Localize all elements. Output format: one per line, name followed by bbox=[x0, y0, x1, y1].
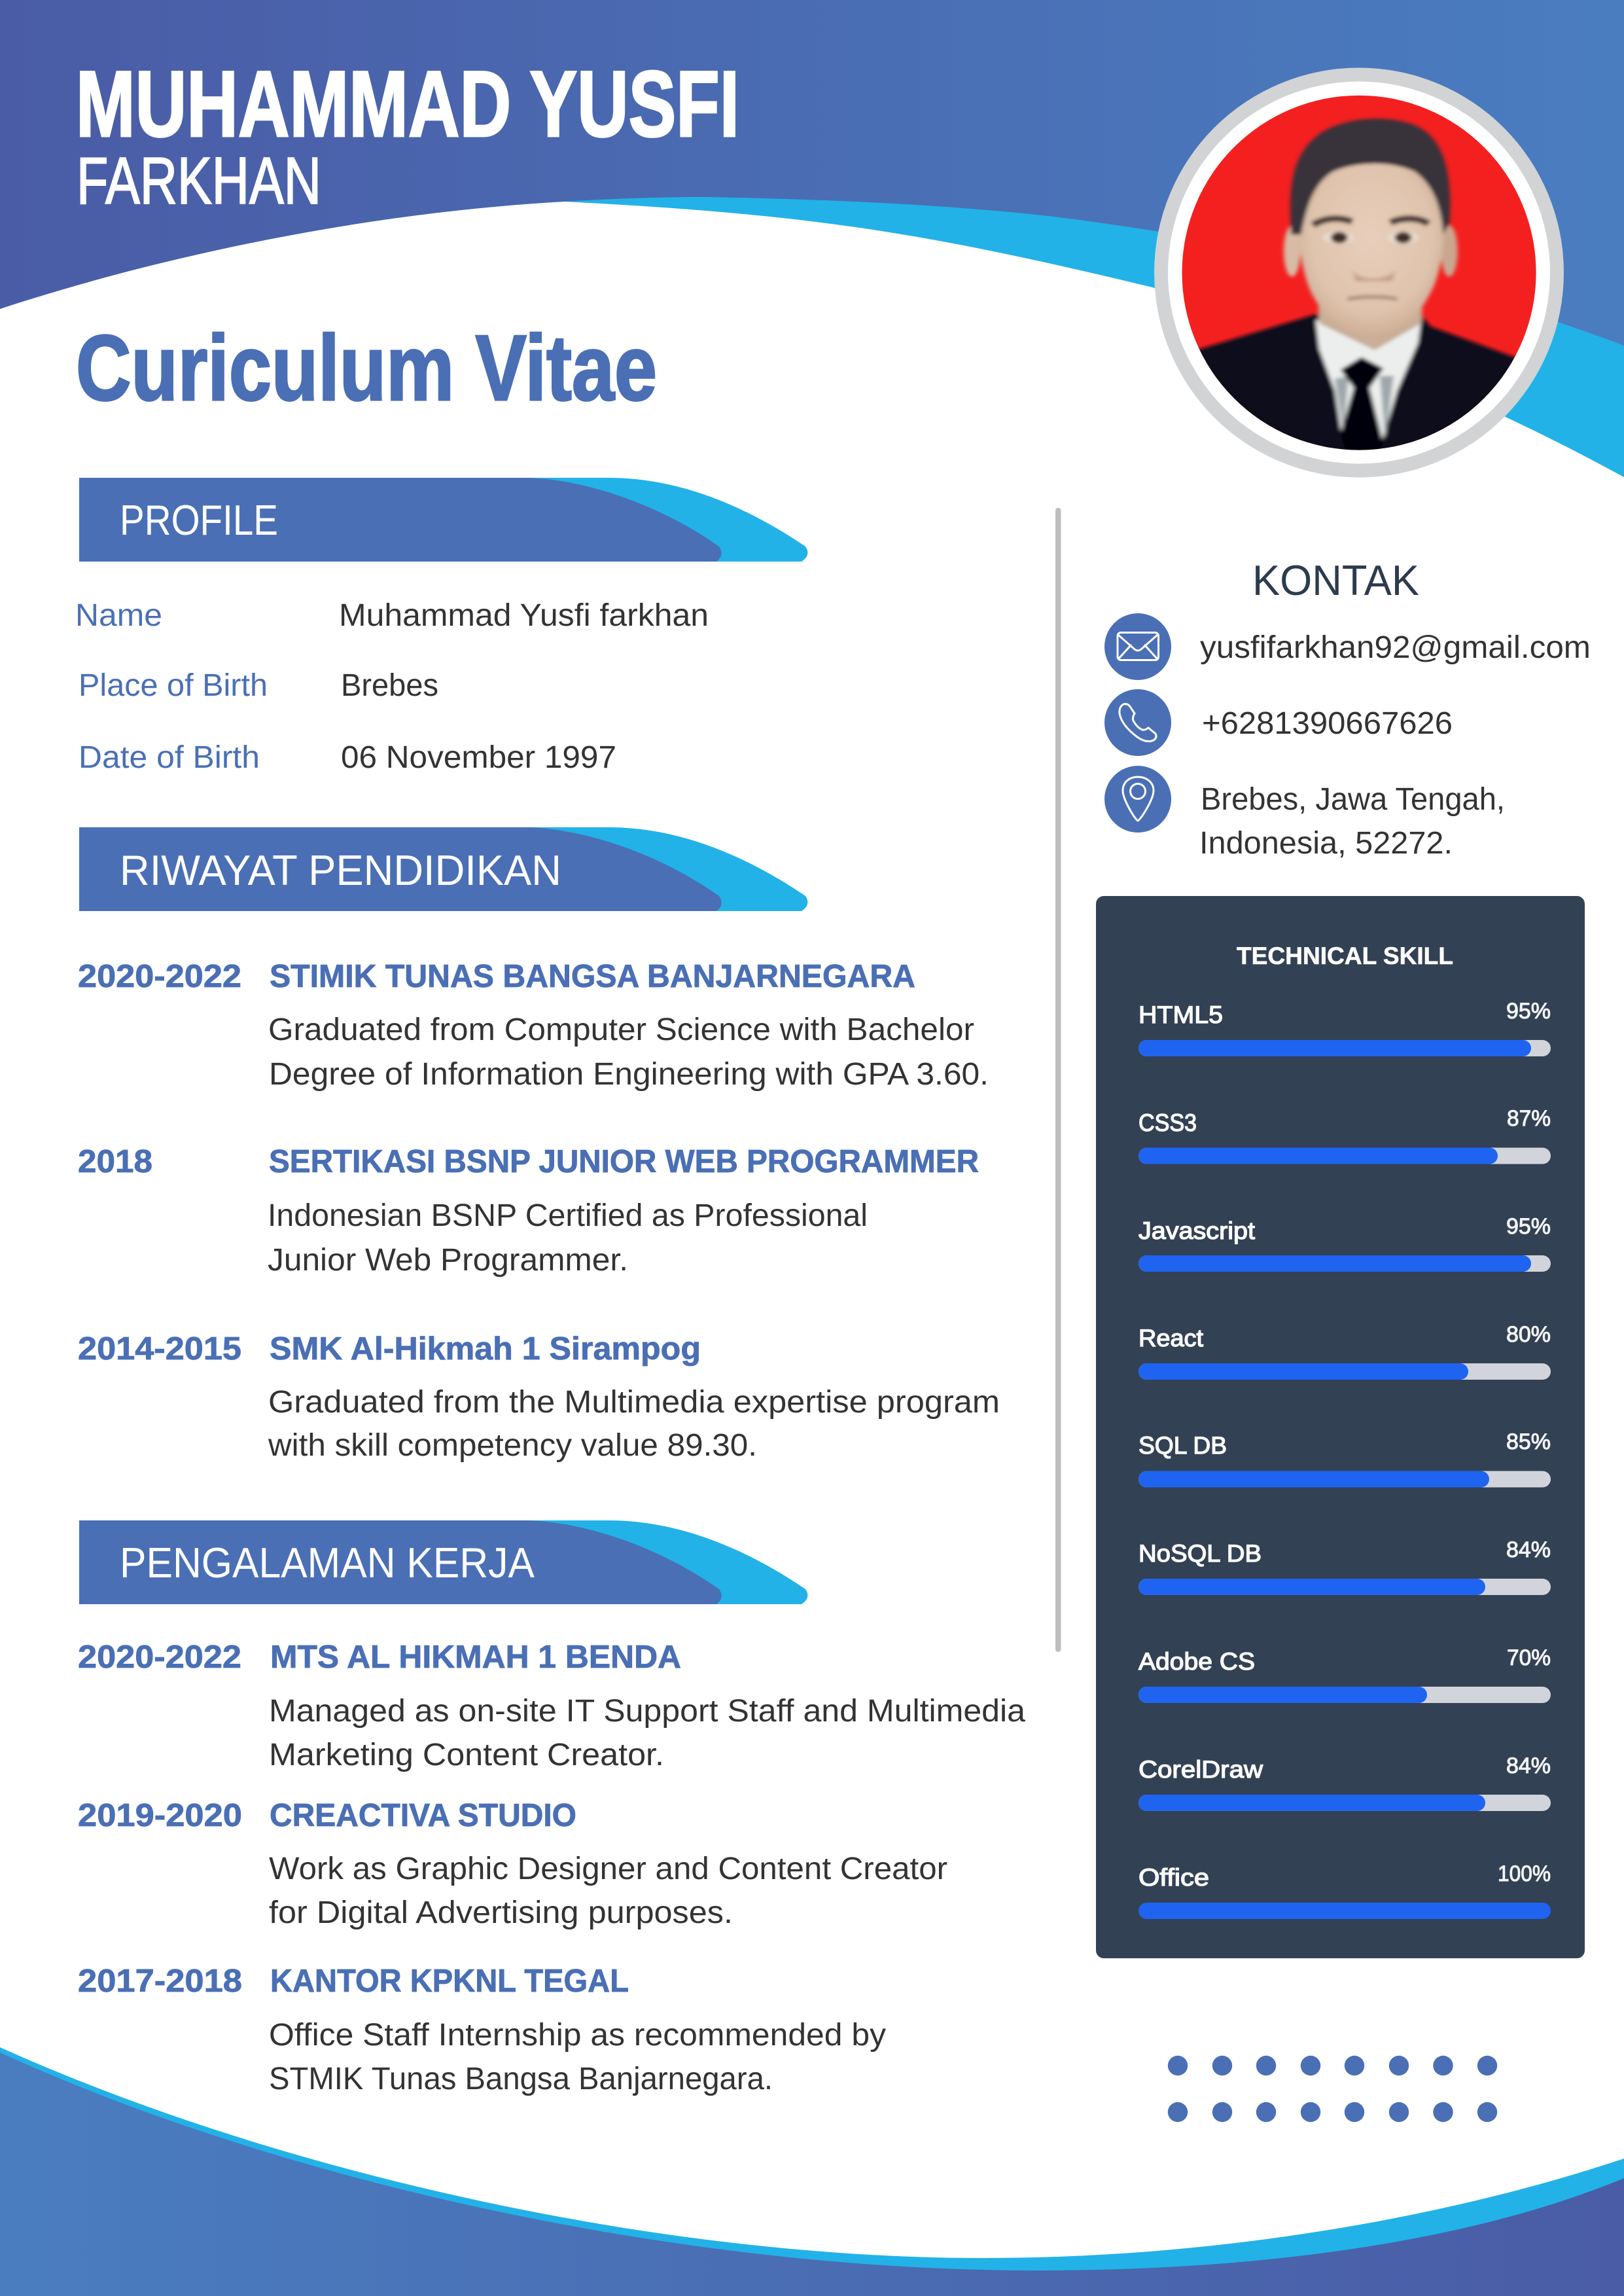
portrait illustration bbox=[1182, 96, 1536, 450]
education entry: SMK: SMK Al-Hikmah 1 Sirampog bbox=[270, 1331, 701, 1367]
name heading: FARKHAN bbox=[77, 145, 321, 218]
footer wave: blue band bbox=[0, 2053, 1624, 2296]
name heading bbox=[76, 52, 739, 218]
profile row: date of birth: 06 November 1997 bbox=[341, 740, 616, 775]
profile row: name: Muhammad Yusfi farkhan bbox=[339, 598, 709, 633]
skill: SQL DB 85%: SQL DB bbox=[1139, 1432, 1227, 1459]
skill: React 80% bbox=[1139, 1322, 1551, 1380]
section header: profile: PROFILE bbox=[120, 496, 278, 544]
profile row: date of birth: Date of Birth bbox=[79, 740, 260, 775]
name heading: MUHAMMAD YUSFI bbox=[76, 52, 739, 156]
footer wave: cyan accent bbox=[0, 2047, 1624, 2296]
skill: SQL DB 85%: 85% bbox=[1506, 1429, 1551, 1454]
icon: email bbox=[1104, 613, 1171, 680]
skill: Office 100%: Office bbox=[1139, 1864, 1209, 1891]
address: Indonesia, 52272. bbox=[1199, 826, 1453, 861]
skill: HTML5 95% bbox=[1139, 999, 1551, 1056]
skill: Adobe CS 70%: 70% bbox=[1507, 1645, 1551, 1670]
skill: CorelDraw 84%: CorelDraw bbox=[1139, 1756, 1263, 1783]
skill: Javascript 95%: 95% bbox=[1506, 1214, 1551, 1239]
education entry: STIMIK bbox=[78, 959, 989, 1092]
skill: CSS3 87%: CSS3 bbox=[1139, 1109, 1197, 1136]
header wave: cyan accent bbox=[0, 164, 1624, 477]
profile row: name: Name bbox=[75, 598, 162, 633]
work entry: KPKNL bbox=[78, 1964, 886, 2096]
education entry: BSNP bbox=[78, 1144, 979, 1278]
education entry: STIMIK: 2020-2022 bbox=[78, 959, 241, 994]
phone number: +6281390667626 bbox=[1202, 706, 1453, 741]
education entry: SMK bbox=[78, 1331, 1000, 1463]
profile row: date of birth bbox=[79, 740, 616, 775]
education entry: SMK: 2014-2015 bbox=[78, 1331, 241, 1367]
profile row: place of birth bbox=[79, 668, 438, 703]
contact heading: KONTAK bbox=[1252, 556, 1419, 604]
education entry: STIMIK: Graduated from Computer Science with Bachelor bbox=[268, 1013, 974, 1047]
skill: NoSQL DB 84%: NoSQL DB bbox=[1139, 1540, 1262, 1567]
work entry: KPKNL: STMIK Tunas Bangsa Banjarnegara. bbox=[269, 2062, 773, 2096]
panel: work experience bbox=[78, 1520, 1025, 2096]
skill: Office 100% bbox=[1139, 1861, 1551, 1919]
work entry: MTS: Managed as on-site IT Support Staff and Multimedia bbox=[269, 1694, 1025, 1729]
title: Curiculum Vitae: Curiculum Vitae bbox=[76, 316, 657, 420]
skill: React 80%: React bbox=[1139, 1325, 1204, 1352]
education entry: BSNP: Indonesian BSNP Certified as Professional bbox=[268, 1198, 868, 1233]
work entry: MTS: 2020-2022 bbox=[78, 1640, 241, 1675]
photo ring bbox=[1154, 68, 1564, 478]
education entry: BSNP: Junior Web Programmer. bbox=[268, 1243, 628, 1278]
contact column divider bbox=[1055, 508, 1061, 1652]
work entry: MTS: Marketing Content Creator. bbox=[269, 1738, 664, 1772]
work entry: Creactiva bbox=[78, 1798, 947, 1930]
profile row: place of birth: Place of Birth bbox=[79, 668, 268, 703]
address: Brebes, Jawa Tengah, bbox=[1201, 782, 1505, 817]
skill: HTML5 95%: HTML5 bbox=[1139, 1001, 1223, 1028]
work entry: Creactiva: Work as Graphic Designer and Content Creator bbox=[269, 1852, 947, 1886]
education entry: STIMIK: STIMIK TUNAS BANGSA BANJARNEGARA bbox=[270, 959, 915, 994]
panel: education bbox=[78, 827, 1000, 1463]
skill: React 80%: 80% bbox=[1506, 1322, 1551, 1347]
work entry: KPKNL: Office Staff Internship as recommended by bbox=[269, 2018, 886, 2053]
skill: CSS3 87% bbox=[1139, 1106, 1551, 1164]
section header: education bbox=[79, 827, 807, 911]
work entry: KPKNL: KANTOR KPKNL TEGAL bbox=[270, 1964, 629, 1999]
profile row: name bbox=[75, 598, 709, 633]
education entry: BSNP: 2018 bbox=[78, 1144, 152, 1179]
decorative dot grid bbox=[1168, 2056, 1497, 2122]
skill: CSS3 87%: 87% bbox=[1507, 1106, 1551, 1131]
section header: work experience bbox=[79, 1520, 807, 1604]
skill panel heading: TECHNICAL SKILL bbox=[1237, 942, 1453, 969]
email address: yusfifarkhan92@gmail.com bbox=[1200, 630, 1591, 665]
education entry: SMK: Graduated from the Multimedia expertise program bbox=[268, 1385, 1000, 1420]
skill: Office 100%: 100% bbox=[1498, 1861, 1551, 1886]
skill: CorelDraw 84%: 84% bbox=[1506, 1753, 1551, 1778]
skill: NoSQL DB 84% bbox=[1139, 1537, 1551, 1595]
skill: CorelDraw 84% bbox=[1139, 1753, 1551, 1811]
portrait photo bbox=[1149, 68, 1566, 478]
section header: education: RIWAYAT PENDIDIKAN bbox=[120, 846, 561, 894]
icon: location bbox=[1104, 766, 1171, 833]
skill: Javascript 95% bbox=[1139, 1214, 1551, 1272]
work entry: Creactiva: CREACTIVA STUDIO bbox=[270, 1798, 576, 1833]
education entry: BSNP: SERTIKASI BSNP JUNIOR WEB PROGRAMMER bbox=[269, 1144, 979, 1179]
work entry: MTS bbox=[78, 1640, 1025, 1772]
skill: Adobe CS 70% bbox=[1139, 1645, 1551, 1703]
work entry: MTS: MTS AL HIKMAH 1 BENDA bbox=[270, 1640, 681, 1675]
work entry: Creactiva: 2019-2020 bbox=[78, 1798, 242, 1833]
icon: phone bbox=[1104, 689, 1171, 756]
address bbox=[1199, 782, 1505, 861]
skill: Javascript 95%: Javascript bbox=[1139, 1217, 1256, 1244]
profile row: place of birth: Brebes bbox=[341, 668, 438, 703]
panel: contact bbox=[1104, 556, 1591, 861]
section header: profile bbox=[79, 478, 807, 562]
skill: SQL DB 85% bbox=[1139, 1429, 1551, 1487]
header wave: blue banner bbox=[0, 0, 1624, 346]
skill: Adobe CS 70%: Adobe CS bbox=[1139, 1648, 1255, 1675]
section header: work experience: PENGALAMAN KERJA bbox=[120, 1539, 535, 1587]
work entry: KPKNL: 2017-2018 bbox=[78, 1964, 242, 1999]
education entry: SMK: with skill competency value 89.30. bbox=[268, 1428, 757, 1463]
panel: technical skill bbox=[1096, 896, 1585, 1958]
work entry: Creactiva: for Digital Advertising purposes. bbox=[269, 1895, 733, 1930]
skill: HTML5 95%: 95% bbox=[1506, 999, 1551, 1024]
panel: profile bbox=[75, 478, 807, 775]
skill: NoSQL DB 84%: 84% bbox=[1506, 1537, 1551, 1562]
education entry: STIMIK: Degree of Information Engineering with GPA 3.60. bbox=[269, 1057, 989, 1092]
